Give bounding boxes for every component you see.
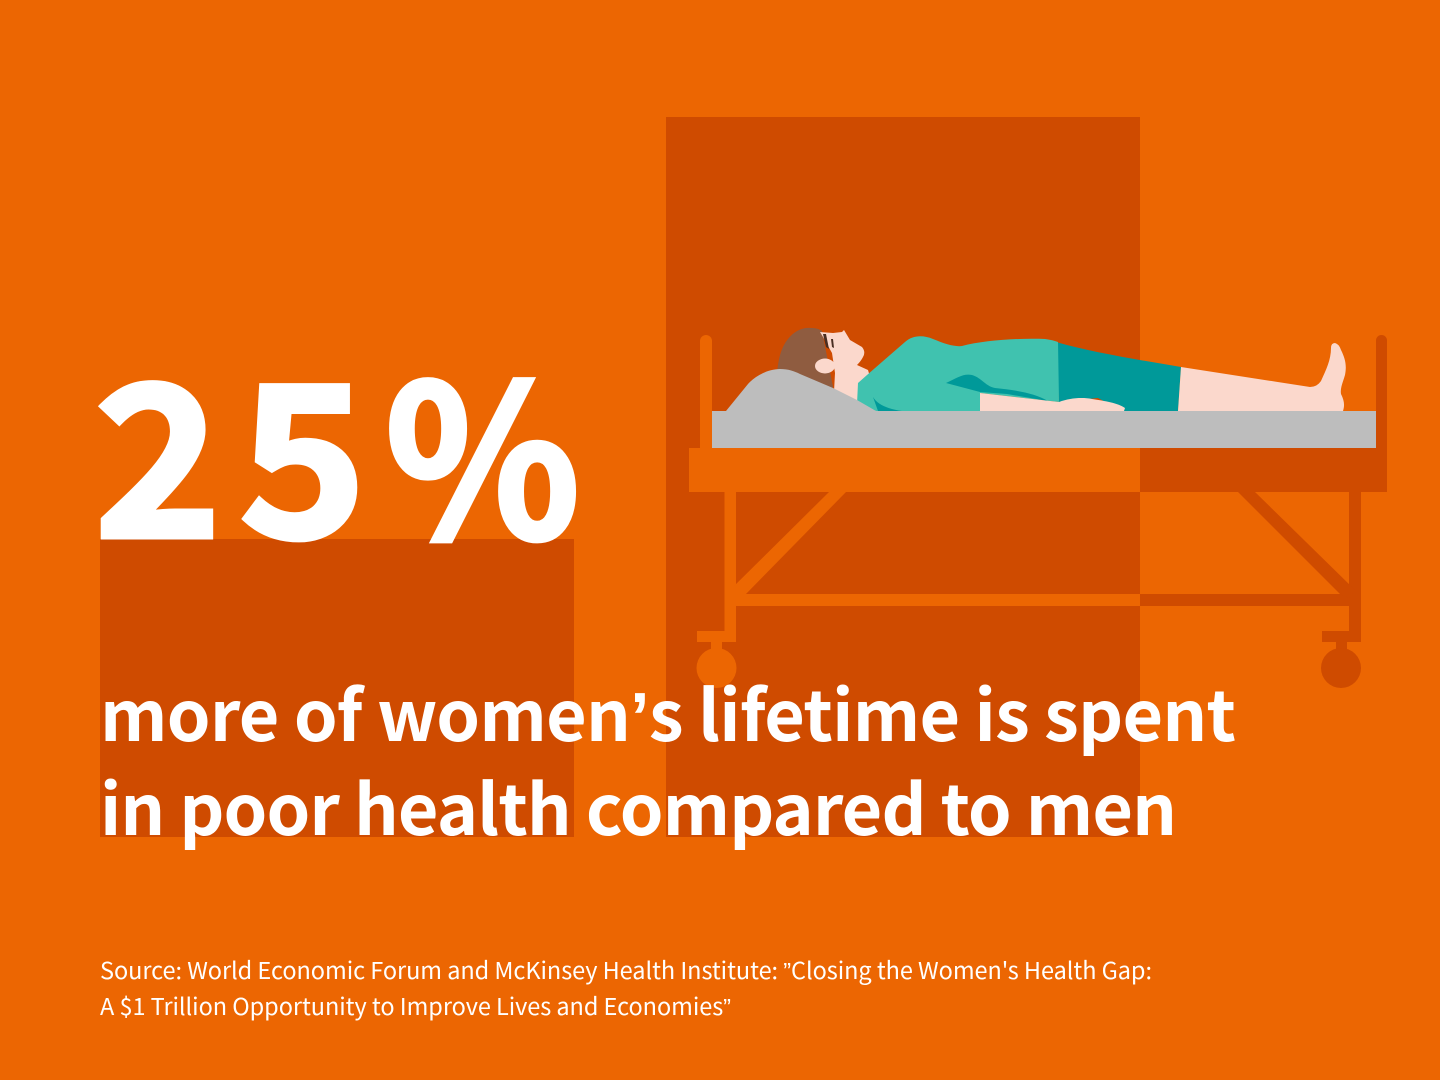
- patient hair: [777, 328, 834, 392]
- patient eyebrow and eye: [823, 334, 834, 349]
- big statistic 25%: 5: [239, 295, 367, 598]
- patient shorts: [1056, 342, 1181, 411]
- headline text: [100, 661, 1236, 856]
- headline text: in poor health compared to men: [100, 755, 1177, 856]
- infographic canvas: [98, 117, 1387, 1020]
- big statistic 25%: %: [385, 296, 580, 599]
- shirt hem fold: [873, 397, 902, 411]
- source note: A $1 Trillion Opportunity to Improve Lives and Economies”: [100, 988, 731, 1022]
- patient leg and foot: [1178, 343, 1346, 411]
- right dark bar: [666, 117, 1140, 837]
- patient head and neck: [820, 330, 880, 411]
- big statistic 25%: [94, 295, 580, 599]
- shirt sleeve fold: [946, 375, 1048, 401]
- headline text: more of women’s lifetime is spent: [100, 661, 1236, 762]
- big statistic 25%: 2: [94, 295, 222, 598]
- hospital bed frame: [689, 335, 1387, 688]
- patient arm: [980, 393, 1125, 411]
- source note: Source: World Economic Forum and McKinsey Health Institute: ”Closing the Women's Health Gap:: [100, 952, 1152, 986]
- patient shirt: [857, 336, 1059, 411]
- icon: patient lying on bed: [712, 328, 1376, 448]
- patient ear: [815, 358, 835, 374]
- left dark bar: [100, 539, 574, 837]
- source note: [100, 952, 1152, 1022]
- bed mattress: [712, 411, 1376, 448]
- bed pillow: [726, 369, 876, 411]
